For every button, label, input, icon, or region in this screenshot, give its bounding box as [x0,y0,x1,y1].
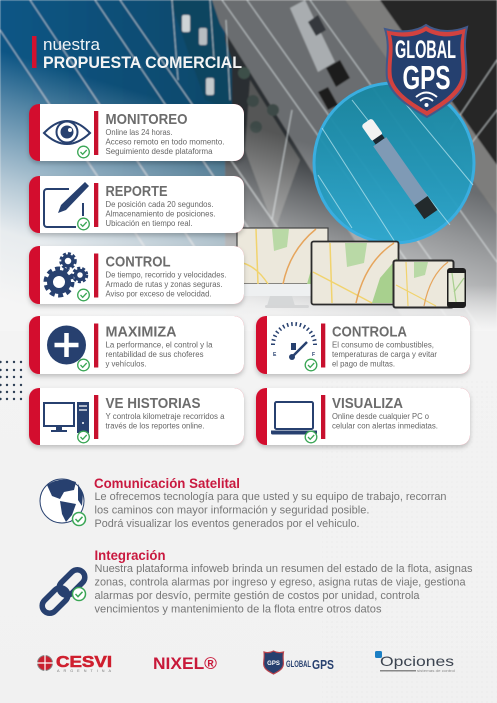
panel: visualiza: celular con alertas inmediatas. [332,422,438,430]
section: comunicación satelital: Podrá visualizar los eventos generados por el vehiculo. [94,518,360,530]
panel: ve historias [29,388,244,445]
background fade to light [0,0,497,331]
panel: control [29,246,244,304]
icon: pencil and document [44,182,89,227]
logo: Global GPS small [264,651,334,674]
panel: monitoreo: Acceso remoto en todo momento. [106,138,224,146]
truck [359,117,437,219]
large tablet [312,242,398,304]
panel: controla: temperaturas de carga y evitar [332,350,437,359]
logo: Global GPS small: GPS [312,657,334,672]
logo: Nixel: NIXEL® [153,654,217,673]
panel: monitoreo: MONITOREO [106,112,188,128]
panel: maximiza: La performance, el control y la [106,340,213,350]
panel: visualiza: VISUALIZA [332,396,403,412]
icon: check [78,359,89,371]
icon: check [72,512,86,526]
icon: check [78,218,89,230]
section: integración: Nuestra plataforma infoweb brinda un resumen del estado de la flota, asignas [94,563,473,575]
icon: eye [44,121,90,144]
section: integración: vencimientos y mantenimiento de la flota entre otros datos [94,604,382,616]
icon: fuel gauge [273,324,315,360]
logo: Global GPS small: GLOBAL [286,659,311,669]
panel: control: Armado de rutas y zonas seguras. [106,280,222,289]
logo: Global GPS shield: GPS [402,59,450,96]
panel: maximiza: y vehículos. [106,360,146,368]
panel: control: Aviso por exceso de velocidad. [106,290,212,298]
panel: ve historias: VE HISTORIAS [106,396,201,412]
panel: monitoreo: Seguimiento desde plataforma [106,147,213,156]
monitor [237,228,328,308]
panel: controla: CONTROLA [332,324,407,340]
section: comunicación satelital [40,476,446,530]
icon: globe [40,479,84,523]
panel: maximiza: rentabilidad de sus choferes [106,350,204,359]
panel: monitoreo: Online las 24 horas. [106,128,172,137]
icon: check [78,289,89,301]
icon: check [78,146,89,158]
panel: controla: El consumo de combustibles, [332,340,434,350]
panel: visualiza [256,388,470,445]
title: nuestra propuesta comercial: nuestra [43,36,101,54]
phone [447,268,466,308]
panel: controla: el pago de multas. [332,360,395,368]
icon: desktop computer [44,402,89,433]
icon: fuel gauge: E [273,352,277,358]
decorative dot pattern, lower right [322,380,497,703]
section: comunicación satelital: Comunicación Satelital [94,476,240,491]
panel: reporte: Ubicación en tiempo real. [106,219,192,228]
title: nuestra propuesta comercial: PROPUESTA COMERCIAL [43,54,242,72]
logo: CESVI Argentina [37,654,112,673]
icon: check [78,431,89,443]
title: nuestra propuesta comercial [32,36,242,72]
section: integración: alarmas por desvío, permite gestión de costos por unidad, controla [94,590,420,602]
panel: reporte: REPORTE [106,184,168,200]
icon: check [305,431,317,443]
logo: Global GPS small: GPS [267,661,280,667]
section: integración: Integración [94,548,166,563]
logo: Opciones: Opciones [380,653,454,669]
panel: reporte: De posición cada 20 segundos. [106,200,214,209]
panel: control: De tiempo, recorrido y velocidades. [106,270,226,280]
section: comunicación satelital: Le ofrecemos tecnología para que usted y su equipo de trabajo, recorran [94,491,446,503]
panel: reporte: Almacenamiento de posiciones. [106,210,216,218]
panel: device mockups with map [237,228,466,308]
icon: fuel gauge: F [312,352,315,358]
logo: CESVI Argentina: CESVI [56,654,112,671]
panel: visualiza: Online desde cualquier PC o [332,412,430,421]
panel: controla [256,316,470,374]
panel: ve historias: través de los reportes online. [106,422,204,430]
logo: Opciones: sistemas de control [417,669,455,673]
tracking circle with truck [314,83,474,243]
icon: plus circle [47,326,86,364]
panel: monitoreo [29,104,244,161]
section: comunicación satelital: los caminos con mayor información y seguridad posible. [94,504,370,516]
icon: gears [46,254,87,296]
icon: check [72,588,86,600]
logo: Global GPS shield [385,25,467,117]
logo: Opciones [375,651,455,673]
panel: maximiza [29,316,244,374]
icon: laptop [271,402,317,434]
panel: reporte [29,176,244,233]
panel: maximiza: MAXIMIZA [106,324,177,340]
panel: ve historias: Y controla kilometraje recorridos a [106,412,225,421]
icon: check [305,359,317,371]
icon: chain link [39,567,88,616]
cars and truck on the road [182,0,350,133]
logo: CESVI Argentina: ARGENTINA [57,669,111,673]
background photo: aerial highway [0,0,497,357]
section: integración [39,548,473,616]
small tablet [394,260,454,308]
decorative dots, left [0,361,22,400]
section: integración: zonas, controla alarmas por ingreso y egreso, asigna rutas de viaje, gestiona [94,576,466,588]
panel: control: CONTROL [106,254,170,270]
